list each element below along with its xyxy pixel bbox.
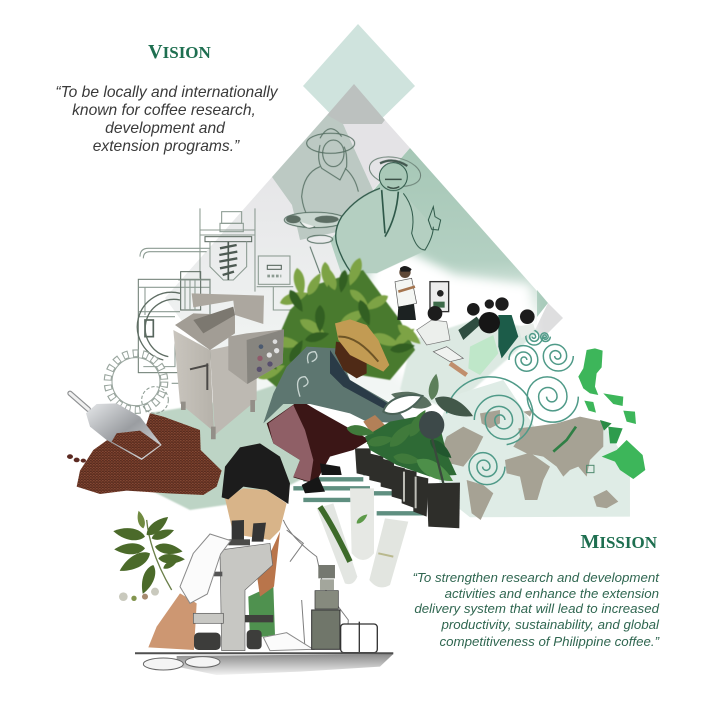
hand <box>363 415 388 437</box>
mission heading: MISSION <box>580 531 658 553</box>
mission statement: activities and enhance the extension <box>445 586 659 601</box>
man farmer sketch <box>336 153 441 273</box>
small grey corner <box>535 303 563 338</box>
lab coat outline <box>283 520 348 648</box>
coffee processing machine <box>173 293 284 439</box>
machine side <box>210 340 257 435</box>
mission statement: competitiveness of Philippine coffee.” <box>439 634 660 649</box>
table edge <box>135 650 393 656</box>
shoes <box>302 477 325 493</box>
row of bags <box>355 448 460 528</box>
background geometric diamonds <box>150 24 563 510</box>
small green corner triangle <box>537 290 548 317</box>
vision statement: extension programs.” <box>93 138 240 155</box>
latch <box>190 363 208 390</box>
hair <box>222 443 290 504</box>
poster board <box>430 282 449 312</box>
seated attendee left <box>417 306 450 345</box>
green main triangle <box>330 148 537 330</box>
pale left triangle <box>165 177 420 400</box>
shirt swirl marks <box>298 352 317 397</box>
tree leaves <box>256 256 424 383</box>
neck and face <box>335 342 367 378</box>
gloved hands <box>180 534 313 651</box>
machine blueprint line drawing <box>108 208 293 413</box>
shirt <box>263 347 408 423</box>
scientist at microscope <box>135 443 393 675</box>
mission statement: delivery system that will lead to increased <box>414 601 660 616</box>
gear outline <box>108 353 164 410</box>
dark shirted attendees <box>458 297 535 358</box>
pale floor wash <box>400 318 540 410</box>
test tubes with plantlets <box>317 488 408 587</box>
green highlight strip <box>553 427 576 452</box>
coffee branch illustration <box>112 510 185 601</box>
table shadow <box>177 654 393 675</box>
mission statement: productivity, sustainability, and global <box>440 617 660 632</box>
left arm <box>148 593 197 650</box>
white clearing behind presenter <box>365 248 535 380</box>
hopper opening <box>193 307 235 333</box>
grey-green diamond <box>272 115 373 240</box>
ground brush strokes <box>293 473 423 513</box>
tall sapling <box>381 373 476 483</box>
presenter and poster <box>395 266 449 320</box>
overlapping grey cap <box>327 84 385 124</box>
bag highlights <box>404 472 416 508</box>
machine legs <box>183 400 253 439</box>
metal scoop <box>70 393 162 460</box>
machine front <box>173 330 214 432</box>
world map panel <box>437 330 645 520</box>
bean pile <box>67 413 222 495</box>
vision statement: known for coffee research, <box>72 102 256 119</box>
foliage mass <box>262 270 415 390</box>
face <box>225 488 287 540</box>
inset locator box <box>587 465 594 473</box>
neck <box>257 532 280 597</box>
pale map backdrop <box>437 380 630 517</box>
green scrubs <box>248 585 275 638</box>
pale ground under machine <box>150 380 320 510</box>
microscope <box>193 520 273 651</box>
seedling foliage mass <box>365 417 457 477</box>
machine top <box>175 313 235 350</box>
trousers <box>267 400 370 484</box>
vision statement: development and <box>105 120 226 137</box>
upright tube <box>350 488 374 560</box>
seedling leaves <box>346 407 457 487</box>
presenter <box>395 266 417 320</box>
Philippines map <box>578 348 645 479</box>
pale grey band <box>343 120 410 190</box>
farmer tending seedlings <box>263 319 423 513</box>
decorative spirals <box>447 330 578 485</box>
tilted tube right <box>369 518 408 587</box>
tilted tube left <box>317 503 357 584</box>
vision heading: VISION <box>148 41 212 63</box>
vision statement: “To be locally and internationally <box>55 84 279 101</box>
straw hat <box>335 319 389 372</box>
seedling bags and plants <box>346 373 476 528</box>
sketch: two farmers <box>284 129 441 273</box>
audience <box>417 297 535 375</box>
harvest tray <box>284 212 346 243</box>
petri dishes <box>143 657 220 670</box>
lab bottles <box>312 565 377 653</box>
control box <box>228 329 284 384</box>
woman farmer sketch <box>302 129 358 273</box>
continents <box>442 410 618 520</box>
coffee tree <box>256 256 424 390</box>
top chute <box>192 293 264 324</box>
coffee beans and scoop <box>67 393 222 495</box>
mission statement: “To strengthen research and development <box>413 570 660 585</box>
top mint diamond <box>303 24 415 142</box>
front attendee <box>433 312 500 375</box>
